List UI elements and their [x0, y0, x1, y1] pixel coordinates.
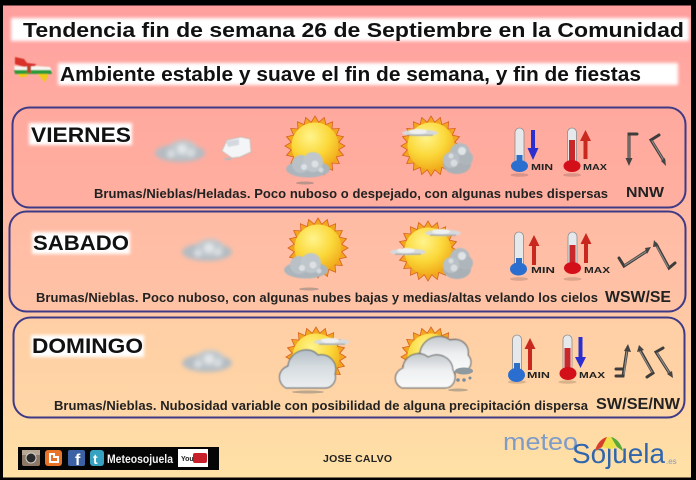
- icon: twitter: [90, 450, 104, 467]
- icon: facebook: f: [75, 452, 81, 469]
- heading: domingo: DOMINGO: [32, 335, 143, 358]
- icon: thermometer max up: [563, 128, 608, 177]
- icon: sun with low clouds: [284, 218, 348, 290]
- icon: thermometer min up: [510, 232, 555, 281]
- text: wind direction: WSW/SE: [605, 289, 671, 306]
- icon: thermometer max down: [558, 335, 606, 384]
- icon: thermometer min up: [508, 335, 550, 384]
- icon: wind arrows: [616, 344, 673, 378]
- icon: sun with big cloud: [279, 327, 350, 394]
- icon: thermometer min down: MIN: [531, 163, 553, 172]
- text: description: Brumas/Nieblas. Nubosidad variable con posibilidad de alguna precipitación dispersa: [54, 398, 589, 413]
- icon: fog: [155, 140, 205, 162]
- social media bar: [18, 447, 219, 470]
- heading: viernes: VIERNES: [31, 124, 131, 147]
- icon: wind arrows: [619, 240, 675, 268]
- panel: sabado: [10, 212, 686, 312]
- logo: meteosojuela: meteo: [503, 429, 578, 456]
- logo: meteosojuela: [503, 429, 677, 469]
- author: JOSE CALVO: [323, 453, 392, 465]
- heading: sabado: SABADO: [33, 232, 129, 255]
- icon: facebook: [68, 450, 85, 469]
- logo: meteosojuela: Sojuela: [572, 438, 665, 469]
- text: meteosojuela: Meteosojuela: [107, 454, 174, 466]
- icon: thermometer max up: MAX: [583, 163, 608, 172]
- icon: blogger: [45, 450, 62, 466]
- icon: La Rioja flag map: [14, 57, 52, 82]
- subtitle: Ambiente estable y suave el fin de semana, y fin de fiestas: [60, 64, 641, 86]
- icon: thermometer max down: MAX: [579, 371, 606, 380]
- logo: meteosojuela: .es: [666, 457, 677, 466]
- icon: frost: [222, 137, 251, 160]
- icon: sun with low cloud: [285, 116, 345, 184]
- icon: thermometer max up: [564, 232, 611, 281]
- icon: fog: [182, 239, 232, 261]
- icon: youtube: You: [181, 456, 194, 463]
- icon: instagram: [22, 450, 40, 466]
- icon: sun with high clouds and storm cloud: [390, 221, 473, 281]
- icon: fog: [182, 350, 232, 372]
- icon: thermometer min down: [510, 128, 553, 177]
- icon: youtube: [178, 449, 208, 467]
- text: wind direction: NNW: [626, 185, 664, 201]
- icon: thermometer max up: MAX: [584, 266, 611, 275]
- panel: viernes: [12, 108, 686, 208]
- icon: thermometer min up: MIN: [531, 266, 555, 275]
- icon: wind arrows: [626, 134, 666, 166]
- text: description: Brumas/Nieblas/Heladas. Poco nuboso o despejado, con algunas nubes dispersas: [94, 186, 608, 201]
- icon: thermometer min up: MIN: [527, 371, 550, 380]
- panel: domingo: [14, 318, 684, 418]
- icon: sun with clouds and rain: [395, 327, 473, 392]
- title: Tendencia fin de semana 26 de Septiembre en la Comunidad: [23, 19, 684, 42]
- icon: sun with high cloud and storm cloud: [401, 116, 473, 176]
- text: wind direction: SW/SE/NW: [596, 396, 680, 413]
- text: description: Brumas/Nieblas. Poco nuboso, con algunas nubes bajas y medias/altas velando los cielos: [36, 290, 598, 305]
- icon: twitter: t: [93, 451, 98, 467]
